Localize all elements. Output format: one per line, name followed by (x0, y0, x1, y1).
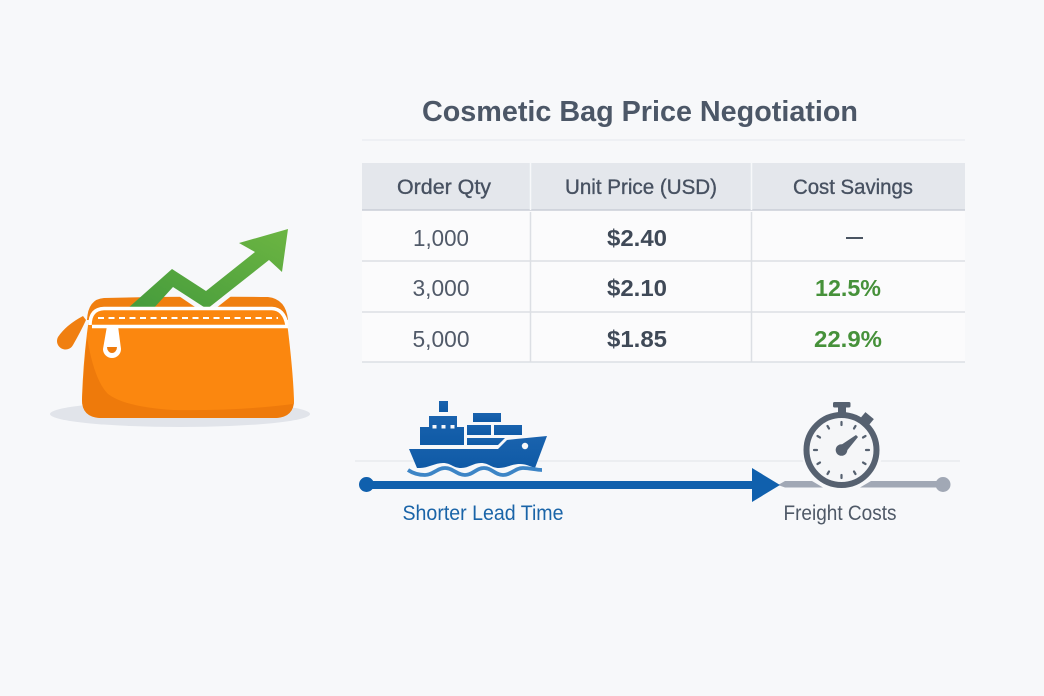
pricing table (362, 163, 965, 362)
blue start point (359, 477, 374, 492)
row: 1,000: 1,000 (413, 225, 469, 251)
table header row (362, 163, 965, 210)
zipper slider (103, 326, 121, 358)
row: 3,000: 12.5% (815, 275, 881, 301)
timeline arrow (359, 468, 950, 502)
bridge (420, 416, 464, 445)
row: 5,000: 22.9% (814, 326, 882, 352)
grey endpoint (936, 477, 950, 492)
containers (473, 413, 501, 422)
green growth arrow (127, 229, 288, 309)
icon: stopwatch (802, 402, 882, 490)
white edge beneath arrow (173, 260, 273, 312)
label: freight costs: Freight Costs (784, 502, 896, 525)
table header row: Cost Savings (793, 176, 913, 199)
bag lower shading (82, 337, 294, 418)
row: 1,000: $2.40 (607, 225, 667, 251)
zipper band (90, 308, 287, 325)
zipper pull tag (57, 316, 86, 350)
row: 3,000: $2.10 (607, 275, 667, 301)
row: 3,000: 3,000 (412, 275, 470, 301)
table header row: Order Qty (397, 176, 492, 199)
case and face (806, 415, 876, 485)
row: 1,000 (413, 225, 863, 251)
table grid lines (362, 212, 965, 362)
grey segments (778, 481, 823, 488)
bag body (82, 308, 294, 418)
funnel (439, 401, 448, 412)
table body (362, 210, 965, 362)
icon: cargo ship (408, 401, 547, 475)
row: 3,000 (412, 275, 881, 301)
row: 5,000: 5,000 (412, 326, 470, 352)
ticks (814, 422, 869, 478)
waves (408, 468, 542, 475)
slider hole (107, 347, 117, 353)
row: 5,000: $1.85 (607, 326, 667, 352)
hull (409, 436, 547, 468)
bag shadow (50, 401, 310, 427)
hand (838, 435, 858, 453)
label: shorter lead time: Shorter Lead Time (402, 502, 564, 525)
row: 5,000 (412, 326, 882, 352)
blue arrowhead (752, 468, 780, 502)
zipper stitching (98, 317, 278, 319)
side button (861, 412, 874, 425)
crown (833, 402, 850, 408)
bag back panel (87, 297, 288, 320)
title: Cosmetic Bag Price Negotiation (422, 96, 858, 128)
porthole (522, 443, 528, 449)
halo (802, 410, 882, 490)
bridge windows (432, 425, 454, 428)
table header row: Unit Price (USD) (565, 176, 717, 199)
icon: cosmetic bag with rising arrow (50, 229, 310, 427)
blue line (366, 481, 756, 489)
